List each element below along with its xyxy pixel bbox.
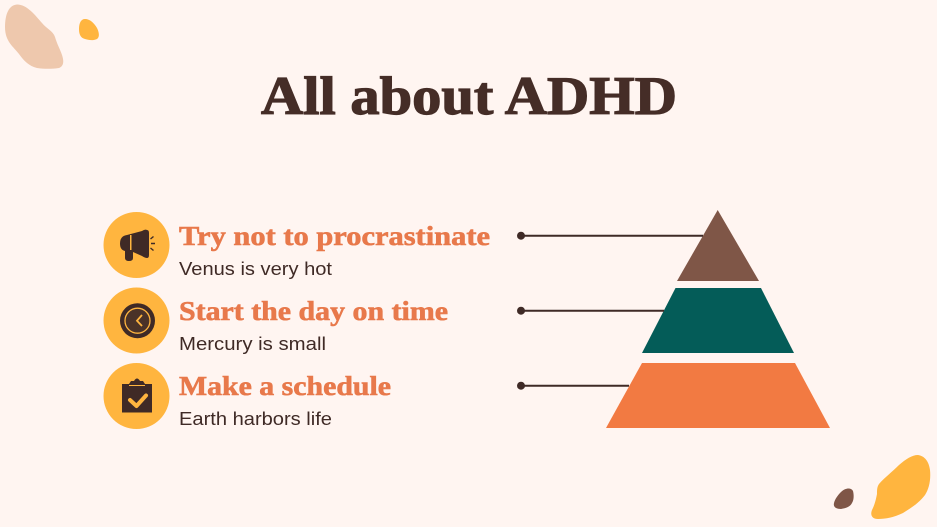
blob: top-left peach (5, 4, 63, 69)
icon: megaphone (104, 212, 170, 278)
pyramid tier: bottom (606, 363, 830, 428)
icon: clock (104, 288, 170, 354)
description: Earth harbors life (179, 409, 332, 429)
heading: Make a schedule (179, 371, 391, 401)
pyramid (606, 210, 830, 428)
blob: top-left yellow (79, 19, 99, 40)
connector: top (517, 232, 703, 240)
list item: schedule (104, 363, 391, 429)
heading: Try not to procrastinate (179, 221, 490, 251)
connector: bottom (517, 382, 629, 390)
description: Venus is very hot (179, 259, 332, 279)
description: Mercury is small (179, 334, 326, 354)
connector: middle (517, 307, 664, 315)
pyramid tier: middle (642, 288, 794, 353)
icon: clipboard (104, 363, 170, 429)
title: All about ADHD (261, 66, 677, 126)
blob: bottom-right brown (834, 488, 854, 509)
list item: procrastinate (104, 212, 490, 279)
list item: on time (104, 288, 448, 354)
pyramid tier: top (677, 210, 759, 281)
blob: bottom-right yellow (871, 455, 930, 519)
heading: Start the day on time (179, 296, 448, 326)
